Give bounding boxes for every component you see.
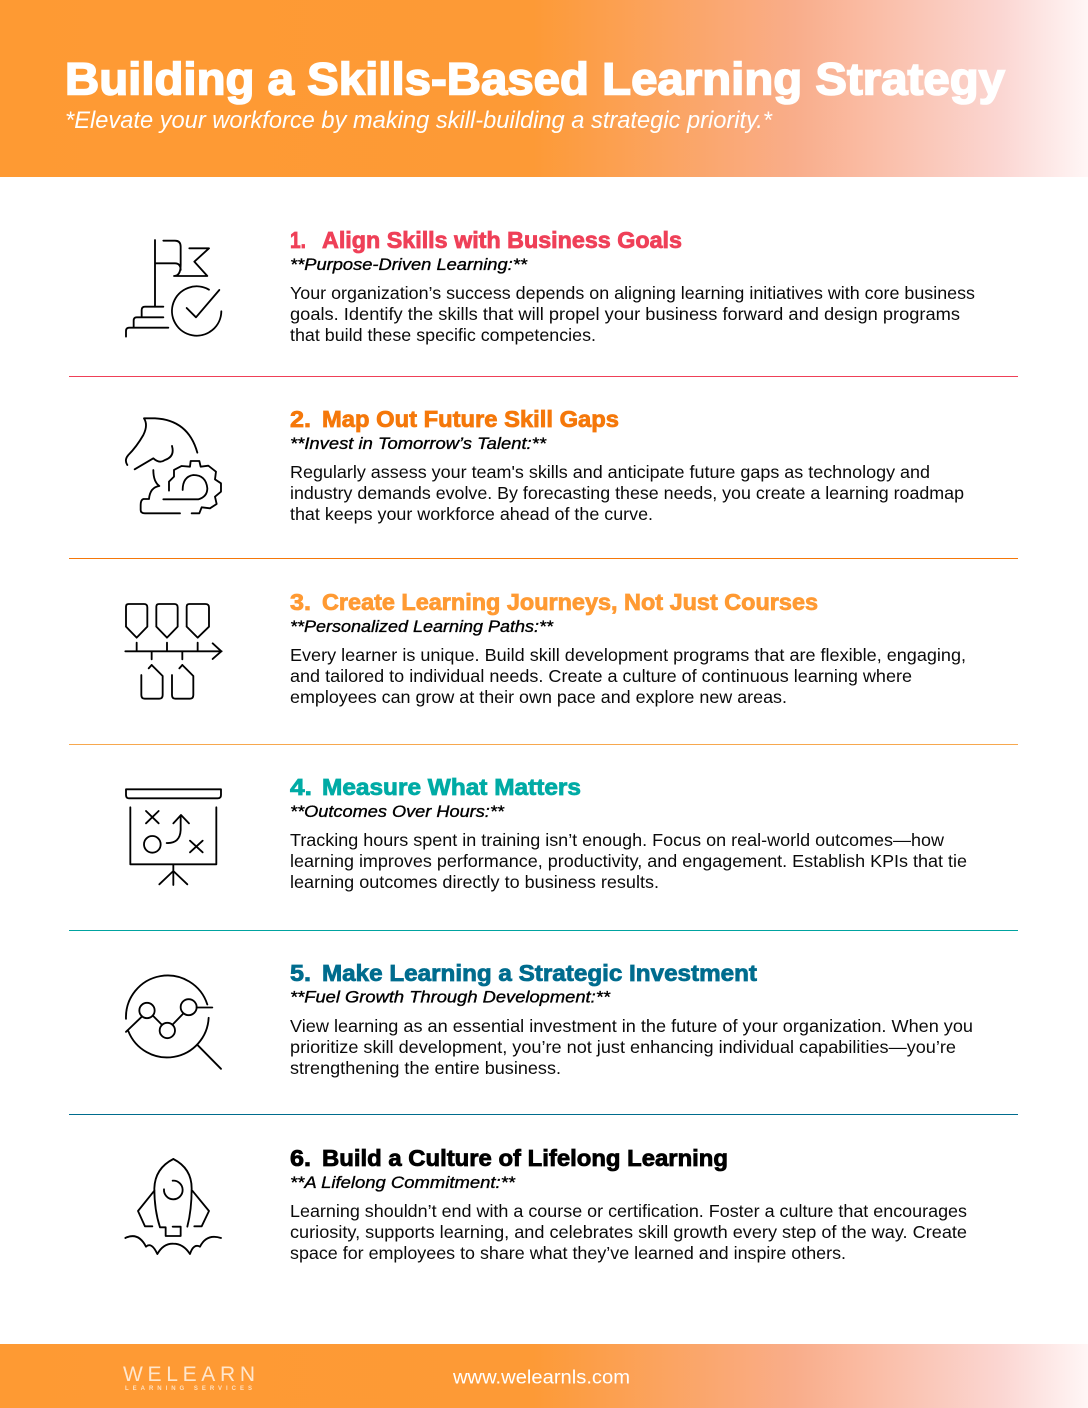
body text: step 5: View learning as an essential investment in the future of your organization. When you [290,1016,973,1036]
icon: rocket launching [125,1159,221,1254]
body text: step 6: Learning shouldn’t end with a course or certification. Foster a culture that encourages [290,1201,967,1221]
body text: step 1: that build these specific competencies. [290,325,596,345]
body text: step 4: learning improves performance, productivity, and engagement. Establish KPIs that tie [290,851,967,871]
subheading: step 5: **Fuel Growth Through Development:** [290,988,611,1006]
panel: section 5 [126,960,973,1078]
subheading: step 3: **Personalized Learning Paths:** [290,617,554,636]
heading: step 1: 1. [290,227,306,253]
icon: flag on steps with check mark [126,240,221,337]
body text: step 3: Every learner is unique. Build skill development programs that are flexible, engaging, [290,645,966,665]
panel: section 2 [126,406,964,524]
heading: step 5: Make Learning a Strategic Investment [322,960,757,986]
body text: step 5 [290,1016,973,1078]
panel: section 1 [126,227,975,345]
subtitle: *Elevate your workforce by making skill-building a strategic priority.* [65,107,773,134]
body text: step 4: learning outcomes directly to business results. [290,872,659,892]
heading: step 4: 4. [290,774,312,800]
heading: step 6: 6. [290,1145,311,1171]
title: Building a Skills-Based Learning Strategy [65,54,1005,104]
heading: step 3: Create Learning Journeys, Not Just Courses [322,589,818,615]
body text: step 4: Tracking hours spent in training isn’t enough. Focus on real-world outcomes—how [290,830,944,850]
body text: step 3 [290,645,966,707]
body text: step 6: curiosity, supports learning, and celebrates skill growth every step of the way. Create [290,1222,967,1242]
heading: step 3: 3. [290,589,311,615]
body text: step 1: Your organization’s success depends on aligning learning initiatives with core business [290,283,975,303]
website url: www.welearnls.com [452,1368,630,1388]
icon: presentation board with strategy [126,789,221,885]
heading: step 4: Measure What Matters [322,774,581,800]
header banner [0,0,1088,177]
icon: magnifier with line chart [126,975,221,1069]
body text: step 1: goals. Identify the skills that will propel your business forward and design programs [290,304,960,324]
subheading: step 6: **A Lifelong Commitment:** [290,1173,516,1192]
subheading: step 4: **Outcomes Over Hours:** [290,802,505,821]
body text: step 2 [290,462,964,524]
heading: step 2: 2. [290,406,311,432]
icon: chess knight with gear [126,418,221,513]
body text: step 6: space for employees to share what they’ve learned and inspire others. [290,1243,846,1263]
heading: step 5: 5. [290,960,311,986]
footer banner [0,1344,1088,1408]
panel: section 4 [126,774,967,892]
logo: WeLearn Learning Services: WELEARN [123,1363,255,1386]
heading: step 6: Build a Culture of Lifelong Learning [322,1145,728,1171]
heading: step 1: Align Skills with Business Goals [322,227,682,253]
body text: step 5: prioritize skill development, you’re not just enhancing individual capabilities—you’re [290,1037,956,1057]
logo: WeLearn Learning Services: LEARNING SERVICES [125,1386,252,1392]
body text: step 2: Regularly assess your team's skills and anticipate future gaps as technology and [290,462,930,482]
body text: step 4 [290,830,967,892]
panel: section 6 [125,1145,967,1263]
body text: step 5: strengthening the entire business. [290,1058,561,1078]
icon: timeline with tags and arrow [125,604,222,699]
heading: step 2: Map Out Future Skill Gaps [322,406,619,432]
body text: step 1 [290,283,975,345]
body text: step 2: that keeps your workforce ahead of the curve. [290,504,653,524]
body text: step 3: employees can grow at their own pace and explore new areas. [290,687,787,707]
panel: section 3 [125,589,966,707]
subheading: step 1: **Purpose-Driven Learning:** [290,255,528,274]
body text: step 6 [290,1201,967,1263]
body text: step 3: and tailored to individual needs. Create a culture of continuous learning where [290,666,912,686]
body text: step 2: industry demands evolve. By forecasting these needs, you create a learning roadmap [290,483,964,503]
subheading: step 2: **Invest in Tomorrow’s Talent:** [290,434,547,453]
